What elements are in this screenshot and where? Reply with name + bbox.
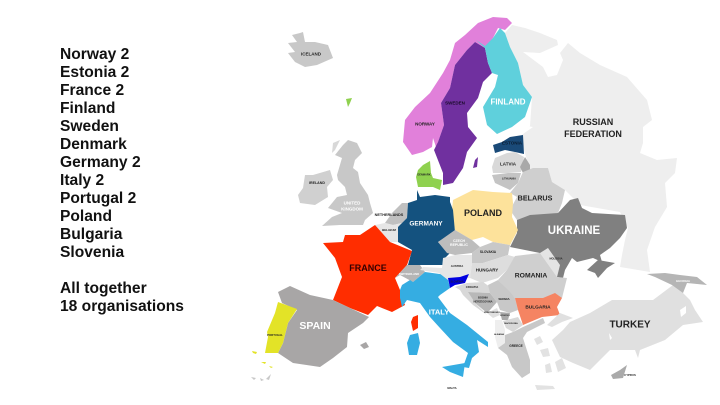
- Gulf of Finland: [495, 125, 533, 137]
- label: Bulgaria: BULGARIA: [525, 304, 551, 310]
- text block: participating countries list: Italy 2: [60, 172, 104, 188]
- label: Slovakia: SLOVAKIA: [480, 250, 497, 254]
- Iceland: [288, 32, 333, 67]
- label: Romania: ROMANIA: [515, 272, 547, 280]
- label: Czech Republic: CZECH: [453, 239, 465, 243]
- label: Czech Republic second line: REPUBLIC: [450, 243, 468, 247]
- Sicily: [442, 363, 465, 377]
- Belgium: [375, 223, 402, 242]
- Denmark: [416, 161, 442, 190]
- text block: participating countries list: Slovenia: [60, 244, 124, 260]
- Poland: [452, 190, 518, 245]
- label: Estonia: ESTONIA: [502, 140, 523, 146]
- label: Poland: POLAND: [464, 208, 502, 218]
- Sardinia: [407, 333, 420, 355]
- Estonia: [493, 135, 524, 154]
- label: Georgia: GEORGIA: [676, 279, 691, 283]
- Netherlands: [385, 203, 408, 225]
- label: Germany: GERMANY: [409, 220, 443, 228]
- text block: participating countries list: Finland: [60, 100, 115, 116]
- text block: participating countries list: Sweden: [60, 118, 119, 134]
- label: Latvia: LATVIA: [500, 162, 517, 166]
- Slovakia: [472, 242, 510, 263]
- label: Austria: AUSTRIA: [451, 264, 463, 268]
- text block: participating countries list: France 2: [60, 82, 124, 98]
- text block: participating countries list: Estonia 2: [60, 64, 129, 80]
- text block: participating countries list: All together: [60, 280, 147, 296]
- Lakes: [609, 306, 686, 340]
- label: Spain: SPAIN: [299, 320, 331, 332]
- label: Hungary: HUNGARY: [476, 268, 498, 272]
- Czech Republic: [438, 230, 480, 255]
- label: Russian Federation: RUSSIAN: [573, 117, 613, 127]
- label: Malta: MALTA: [447, 386, 457, 390]
- country labels: [267, 52, 691, 390]
- text block: participating countries list: 18 organisations: [60, 298, 184, 314]
- Hungary: [470, 255, 515, 283]
- Canary Islands: [251, 374, 271, 381]
- Bulgaria: [515, 293, 562, 325]
- France: [323, 225, 412, 315]
- Russian Federation: [505, 25, 677, 272]
- text block: participating countries list: [60, 46, 184, 314]
- Macedonia: [503, 317, 523, 332]
- Sweden: [434, 42, 492, 185]
- Ukraine: [510, 198, 627, 278]
- text block: participating countries list: Denmark: [60, 136, 127, 152]
- label: Herzegovina: HERZEGOVINA: [473, 300, 493, 304]
- Romania: [498, 253, 567, 298]
- Balearic Islands: [360, 342, 369, 349]
- Spain: [278, 286, 369, 367]
- label: Lithuania: LITHUANIA: [502, 176, 516, 180]
- label: Russian Federation second line: FEDERATION: [564, 129, 622, 139]
- label: Netherlands: NETHERLANDS: [375, 213, 404, 217]
- Turkey: [552, 285, 703, 370]
- label: Croatia: CROATIA: [466, 285, 478, 289]
- Albania: [495, 320, 505, 348]
- label: Belgium: BELGIUM: [382, 228, 396, 232]
- text block: participating countries list: Poland: [60, 208, 112, 224]
- text block: participating countries list: Norway 2: [60, 46, 129, 62]
- label: Italy: ITALY: [429, 308, 449, 316]
- label: Finland: FINLAND: [490, 98, 526, 106]
- label: Iceland: ICELAND: [301, 52, 322, 56]
- Ireland: [298, 170, 333, 205]
- Finland: [476, 28, 532, 134]
- Bosnia and Herzegovina: [468, 292, 497, 313]
- Moldova: [540, 248, 565, 277]
- Greek islands: [534, 336, 566, 390]
- label: Ukraine: UKRAINE: [548, 225, 601, 237]
- Slovenia: [448, 274, 469, 288]
- label: France: FRANCE: [349, 263, 387, 273]
- text block: participating countries list: Portugal 2: [60, 190, 136, 206]
- Germany: [398, 190, 455, 265]
- Lithuania: [492, 173, 521, 190]
- label: Slovenia: SLOVENIA: [450, 280, 464, 284]
- Russia border region: [520, 157, 530, 173]
- label: Moldova: MOLDOVA: [549, 256, 563, 260]
- text block: participating countries list: Germany 2: [60, 154, 141, 170]
- Switzerland: [395, 265, 425, 282]
- label: United Kingdom: UNITED: [344, 200, 361, 206]
- label: Macedonia: MACEDONIA: [504, 322, 518, 325]
- label: Turkey: TURKEY: [609, 320, 651, 330]
- label: Kosovo: KOSOVO: [500, 315, 510, 317]
- Eastern Thrace: [547, 313, 573, 327]
- Italy: [400, 272, 488, 368]
- label: Belarus: BELARUS: [518, 194, 553, 202]
- Gotland: [473, 157, 478, 168]
- Greece: [498, 318, 545, 378]
- label: Portugal: PORTUGAL: [267, 333, 283, 337]
- Georgia: [647, 273, 707, 293]
- Serbia: [488, 280, 518, 313]
- Portugal: [265, 302, 297, 353]
- label: Albania: ALBANIA: [494, 333, 504, 336]
- Kosovo: [500, 312, 510, 320]
- label: United Kingdom second line: KINGDOM: [341, 206, 363, 212]
- label: Montenegro: MONTENEGRO: [484, 312, 500, 314]
- label: Denmark: DENMARK: [417, 172, 431, 176]
- label: Ireland: IRELAND: [309, 181, 325, 185]
- Belarus: [510, 168, 565, 220]
- Croatia: [455, 282, 490, 315]
- Montenegro: [487, 308, 500, 318]
- text block: participating countries list: Bulgaria: [60, 226, 122, 242]
- United Kingdom: [322, 140, 373, 226]
- label: Cyprus: CYPRUS: [624, 373, 636, 377]
- label: Bosnia: BOSNIA: [478, 296, 488, 300]
- Faroe Islands: [346, 98, 352, 107]
- Crimea: [587, 260, 615, 278]
- Hebrides: [332, 140, 340, 153]
- label: Switzerland: SWITZERLAND: [399, 272, 419, 276]
- Norway: [403, 17, 512, 155]
- label: Greece: GREECE: [509, 344, 523, 348]
- Latvia: [492, 152, 524, 173]
- label: Sweden: SWEDEN: [445, 100, 465, 106]
- Corsica: [411, 315, 418, 331]
- Cyprus: [611, 365, 627, 379]
- label: Serbia: SERBIA: [498, 297, 510, 301]
- Azores and Madeira: [252, 351, 273, 368]
- label: Norway: NORWAY: [415, 122, 435, 126]
- Austria: [420, 255, 472, 280]
